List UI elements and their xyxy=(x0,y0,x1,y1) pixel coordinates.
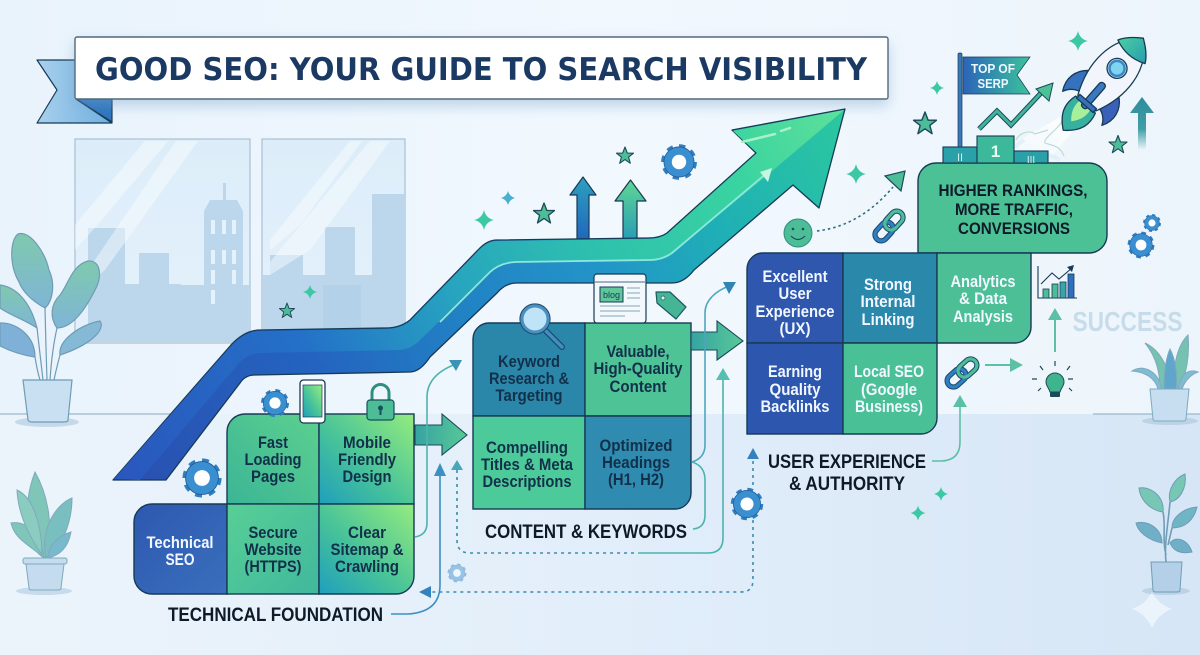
panel: technical foundation xyxy=(134,414,414,594)
panel: user experience and authority: Business) xyxy=(855,397,923,416)
floor line xyxy=(0,413,1200,415)
panel: technical foundation: Sitemap & xyxy=(330,540,404,559)
panel: technical foundation: Website xyxy=(244,540,302,559)
icon: blog browser window xyxy=(594,274,646,323)
arrow: faded up arrow xyxy=(1130,97,1154,150)
panel: content and keywords: Headings xyxy=(602,453,670,472)
sparkle near flag xyxy=(930,81,944,95)
panel: content and keywords: Targeting xyxy=(496,386,562,405)
heading: user experience and authority: & AUTHORITY xyxy=(789,474,905,495)
icon: padlock xyxy=(367,384,394,420)
flag: top of serp xyxy=(958,53,1030,147)
panel: content and keywords: Optimized xyxy=(600,436,672,455)
podium: III xyxy=(1027,155,1035,166)
panel: technical foundation: Design xyxy=(342,467,392,486)
arrow: link to bulb xyxy=(985,358,1023,372)
panel: user experience and authority: Linking xyxy=(862,310,914,329)
panel: content and keywords: Research & xyxy=(489,369,569,388)
panel: higher rankings: MORE TRAFFIC, xyxy=(955,200,1073,219)
panel: technical foundation: Technical xyxy=(146,533,214,552)
panel: user experience and authority xyxy=(747,253,1031,434)
panel: technical foundation: Fast xyxy=(258,433,288,452)
panel: content and keywords: Keyword xyxy=(498,352,560,371)
podium: II xyxy=(957,152,963,164)
panel: technical foundation: SEO xyxy=(166,550,194,569)
panel: content and keywords xyxy=(473,323,691,509)
icon: gear with dotted arrow xyxy=(733,448,761,518)
panel: user experience and authority: (UX) xyxy=(780,319,810,338)
panel: user experience and authority: Analytics xyxy=(950,272,1016,291)
sparkle near rocket xyxy=(1068,31,1088,51)
star near podium xyxy=(914,112,936,134)
panel: higher rankings: CONVERSIONS xyxy=(958,219,1070,238)
icon: gear above arrow xyxy=(664,147,694,177)
panel: technical foundation: Secure xyxy=(248,523,298,542)
plant: upper right xyxy=(1132,335,1198,425)
ribbon tail xyxy=(37,60,112,123)
icon: chain link lower xyxy=(945,356,979,390)
panel: user experience and authority: Strong xyxy=(864,275,912,294)
panel: user experience and authority: Local SEO xyxy=(854,362,924,381)
panel: content and keywords: (H1, H2) xyxy=(608,470,664,489)
panel: content and keywords: Compelling xyxy=(486,438,568,457)
arrow: up to chart xyxy=(1048,308,1062,352)
heading: content and keywords: CONTENT & KEYWORDS xyxy=(485,522,687,543)
title box xyxy=(75,37,888,99)
main growth arrow xyxy=(113,109,845,480)
plant: upper left xyxy=(0,234,101,427)
arrow: content to user experience xyxy=(691,321,743,360)
panel: user experience and authority: (Google xyxy=(861,380,917,399)
flag: top of serp: SERP xyxy=(978,76,1009,91)
panel: user experience and authority: Backlinks xyxy=(760,397,830,416)
heading: user experience and authority xyxy=(768,452,926,495)
panel: content and keywords: Descriptions xyxy=(482,472,572,491)
panel: user experience and authority: Earning xyxy=(768,362,822,381)
rocket smoke xyxy=(1000,116,1072,163)
icon: gear on technical panel xyxy=(263,391,287,415)
panel: technical foundation: Pages xyxy=(251,467,295,486)
panel: technical foundation: Friendly xyxy=(338,450,396,469)
panel: technical foundation: Mobile xyxy=(343,433,391,452)
panel: user experience and authority: Excellent xyxy=(762,267,828,286)
connector: foundation label to content xyxy=(391,463,446,614)
decoration: faint sparkle xyxy=(1132,592,1172,628)
panel: user experience and authority: User xyxy=(778,284,812,303)
decorative stars and sparkles above the arrow xyxy=(474,147,634,230)
connector: bracket from content panel xyxy=(692,282,736,529)
podium: 1 xyxy=(991,142,1000,161)
icon: chain link upper xyxy=(872,209,906,243)
icon: gear left of technical panel xyxy=(186,462,218,494)
plant: lower left xyxy=(11,472,72,595)
connector: dotted return to technical xyxy=(419,520,753,598)
icon: bar chart xyxy=(1038,265,1077,298)
up arrows on main arrow xyxy=(570,177,646,239)
panel: higher rankings: HIGHER RANKINGS, xyxy=(938,181,1088,200)
icon: blog browser window: blog xyxy=(603,290,620,300)
panel: content and keywords: Valuable, xyxy=(606,342,670,361)
panel: user experience and authority: & Data xyxy=(959,289,1007,308)
icon: rocket xyxy=(1041,19,1166,150)
icon: tag xyxy=(656,292,686,319)
panel: technical foundation: Loading xyxy=(244,450,302,469)
icon: phone xyxy=(300,380,325,423)
panel: technical foundation: Crawling xyxy=(335,557,399,576)
panel: content and keywords: Content xyxy=(610,377,667,396)
title banner xyxy=(37,37,888,123)
panel: content and keywords: High-Quality xyxy=(594,359,683,378)
heading: user experience and authority: USER EXPERIENCE xyxy=(768,452,926,473)
panel: technical foundation: (HTTPS) xyxy=(244,557,302,576)
icon: light bulb xyxy=(1032,361,1073,397)
icon: magnifier xyxy=(520,304,562,347)
floor xyxy=(0,414,1200,655)
sparkles below authority label xyxy=(910,487,948,520)
heading: technical foundation: TECHNICAL FOUNDATION xyxy=(168,605,383,626)
title text: GOOD SEO: YOUR GUIDE TO SEARCH VISIBILITY xyxy=(95,52,868,88)
icon: smiley with dotted arrow xyxy=(784,171,905,247)
podium xyxy=(943,136,1048,166)
panel: user experience and authority: Analysis xyxy=(953,307,1013,326)
panel: user experience and authority: Internal xyxy=(860,292,916,311)
panel: technical foundation: Clear xyxy=(348,523,386,542)
plant: lower right xyxy=(1136,474,1197,595)
connector: dotted and solid path to user experience xyxy=(451,368,730,553)
icon: small gears right xyxy=(1130,215,1160,256)
icon: trend arrow xyxy=(979,83,1053,129)
panel: content and keywords: Titles & Meta xyxy=(481,455,573,474)
flag: top of serp: TOP OF xyxy=(971,61,1015,76)
arrow: technical to content xyxy=(415,414,467,455)
connector: authority label to link icon xyxy=(932,395,967,461)
panel: user experience and authority: Experience xyxy=(756,302,834,321)
star near rocket xyxy=(1109,136,1127,153)
icon: faint gear xyxy=(449,565,465,581)
sparkle near arrow head xyxy=(846,164,866,184)
panel: user experience and authority: Quality xyxy=(770,380,821,399)
panel: higher rankings xyxy=(918,163,1107,253)
connector: technical panel up to content xyxy=(415,360,462,537)
small star and sparkle on window xyxy=(279,285,317,317)
background wall xyxy=(0,0,1200,414)
window with city skyline xyxy=(75,139,405,343)
